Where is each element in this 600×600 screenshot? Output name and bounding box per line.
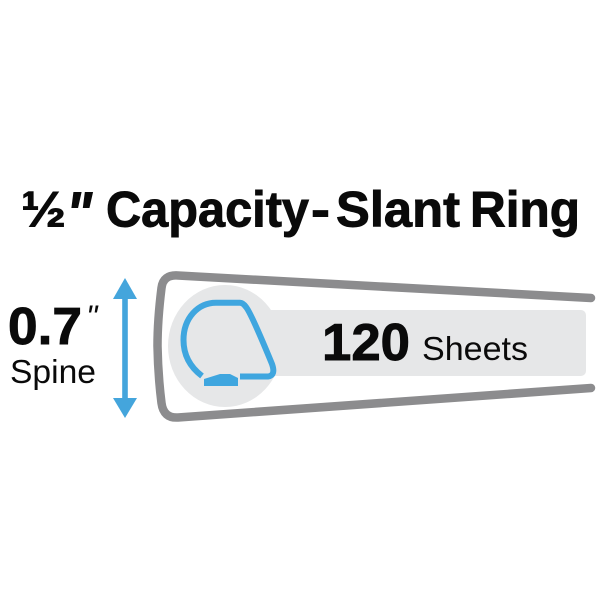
icon: slant ring bbox=[184, 303, 273, 386]
spine measurement label bbox=[8, 298, 99, 390]
title: Slant bbox=[336, 182, 460, 238]
title bbox=[21, 180, 580, 247]
title: Ring bbox=[470, 182, 580, 238]
sheet count label bbox=[322, 314, 528, 372]
binder outline bbox=[158, 275, 591, 418]
title: - bbox=[311, 182, 330, 238]
sheet count label: 120 bbox=[322, 314, 410, 372]
spine measurement label: " bbox=[86, 299, 99, 335]
sheet capacity panel bbox=[168, 285, 586, 407]
title: ½ bbox=[21, 182, 66, 238]
sheet count label: Sheets bbox=[422, 330, 528, 367]
title: " bbox=[66, 180, 93, 247]
title: Capacity bbox=[106, 182, 309, 238]
icon: double-headed spine arrow bbox=[113, 278, 137, 418]
spine measurement label: 0.7 bbox=[8, 298, 82, 356]
spine measurement label: Spine bbox=[10, 353, 96, 390]
